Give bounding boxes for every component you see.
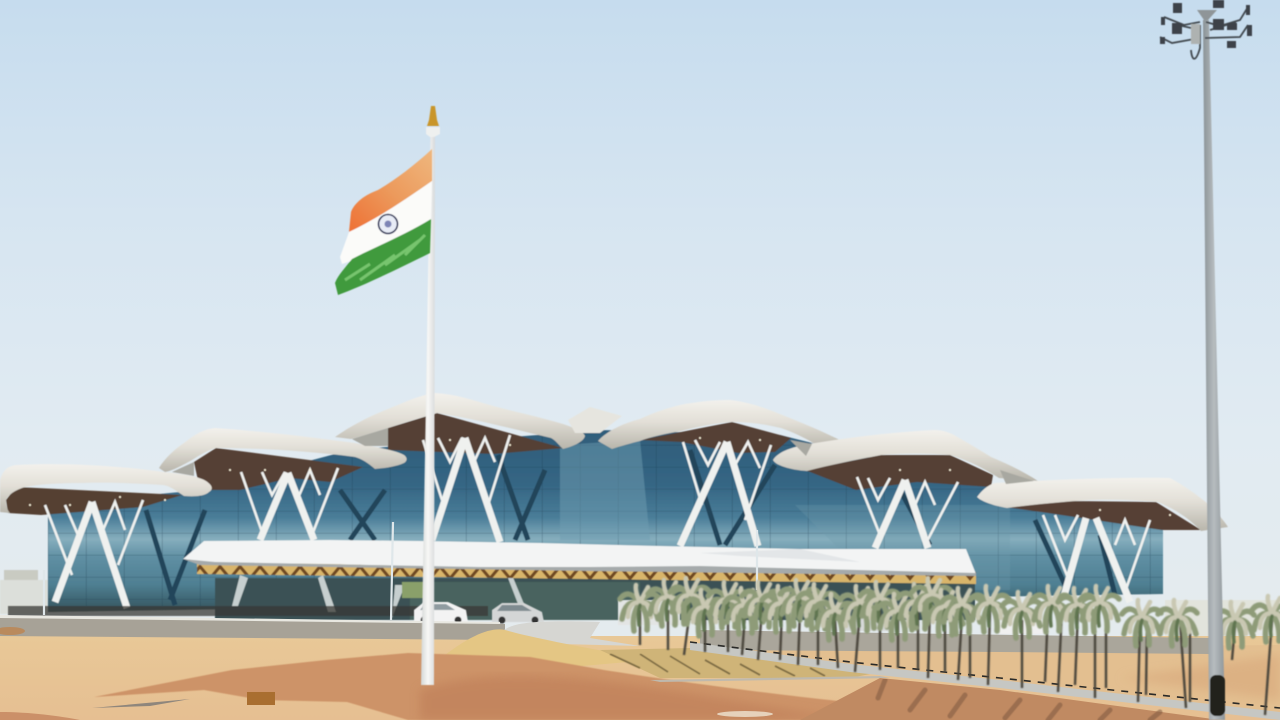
lamp housing [1197, 10, 1217, 20]
pole base hatch [1210, 675, 1225, 716]
terminal building [0, 393, 1228, 620]
roof centre block [568, 407, 622, 433]
distant buildings left [0, 570, 48, 614]
canopy 5 soffit [805, 455, 993, 490]
white car 3 [999, 615, 1046, 634]
lower entrance level [215, 575, 975, 620]
roof canopy 6 [977, 478, 1228, 531]
silver car 4 [842, 616, 890, 631]
boundary wall right [700, 630, 1210, 654]
railing shadow [8, 606, 488, 616]
Ashoka chakra [378, 214, 398, 234]
roof canopy 3 [335, 393, 585, 449]
base sand [0, 636, 1280, 720]
boundary wall left [0, 616, 505, 640]
glass facade [48, 430, 1163, 612]
shadow patch [92, 699, 190, 708]
distant haze right [1165, 600, 1280, 640]
portico fringe decoration [197, 561, 976, 584]
pole collar [426, 127, 440, 137]
canopy 4 soffit [640, 422, 791, 453]
support 5 [857, 477, 958, 548]
far sand beyond road on the right [700, 645, 1280, 712]
roof canopy 1 [0, 464, 212, 513]
mast head [1160, 7, 1248, 59]
small lamp posts [44, 522, 757, 620]
white car 5 [1244, 624, 1270, 640]
canopy 1 soffit [6, 487, 182, 515]
gold finial [427, 106, 439, 126]
roof lights [29, 437, 1171, 516]
building equipment under roofs [172, 428, 1034, 484]
canopy 6 soffit [1005, 501, 1201, 530]
portico white canopy [183, 540, 976, 574]
support 4 [680, 440, 771, 546]
sand mound [445, 629, 650, 668]
white band [340, 181, 432, 264]
eroded embankment [800, 678, 1220, 720]
red earth mound [94, 653, 1180, 720]
pale patch on ground [717, 711, 773, 717]
curved road [504, 621, 640, 646]
support 3 [423, 435, 510, 542]
floodlight mast [1160, 0, 1252, 720]
roof canopy 4 [598, 400, 844, 449]
silver car 2 [492, 603, 544, 622]
saffron band [349, 149, 432, 232]
road along palm row [690, 642, 1280, 720]
brick stack [247, 692, 275, 705]
palm trees row [620, 578, 1280, 715]
ground [0, 615, 1280, 720]
bright reflection in glass centre [560, 440, 650, 540]
support 1 [45, 500, 143, 608]
flagpole [421, 106, 440, 685]
support 2 [241, 468, 338, 540]
planted slope [600, 648, 880, 678]
palm crowns [620, 578, 1280, 648]
roof canopy 2 [159, 428, 407, 472]
canopy 3 soffit [388, 413, 563, 454]
roof canopy 5 [773, 430, 1038, 481]
floodlights [1160, 0, 1252, 48]
dark diagonal struts [146, 450, 1115, 605]
bottom-left red earth [0, 712, 80, 720]
support 6 [1043, 515, 1150, 602]
white car 1 [414, 602, 468, 622]
parked cars [414, 600, 1270, 640]
paved strip [650, 676, 890, 682]
canopy 2 soffit [194, 448, 363, 490]
green band [335, 219, 431, 295]
rubble left [0, 627, 25, 635]
striped kerb [690, 642, 1280, 708]
W supports in white [45, 435, 1150, 608]
Indian flag [335, 149, 432, 295]
palm trunks [640, 605, 1272, 715]
van [618, 600, 680, 625]
